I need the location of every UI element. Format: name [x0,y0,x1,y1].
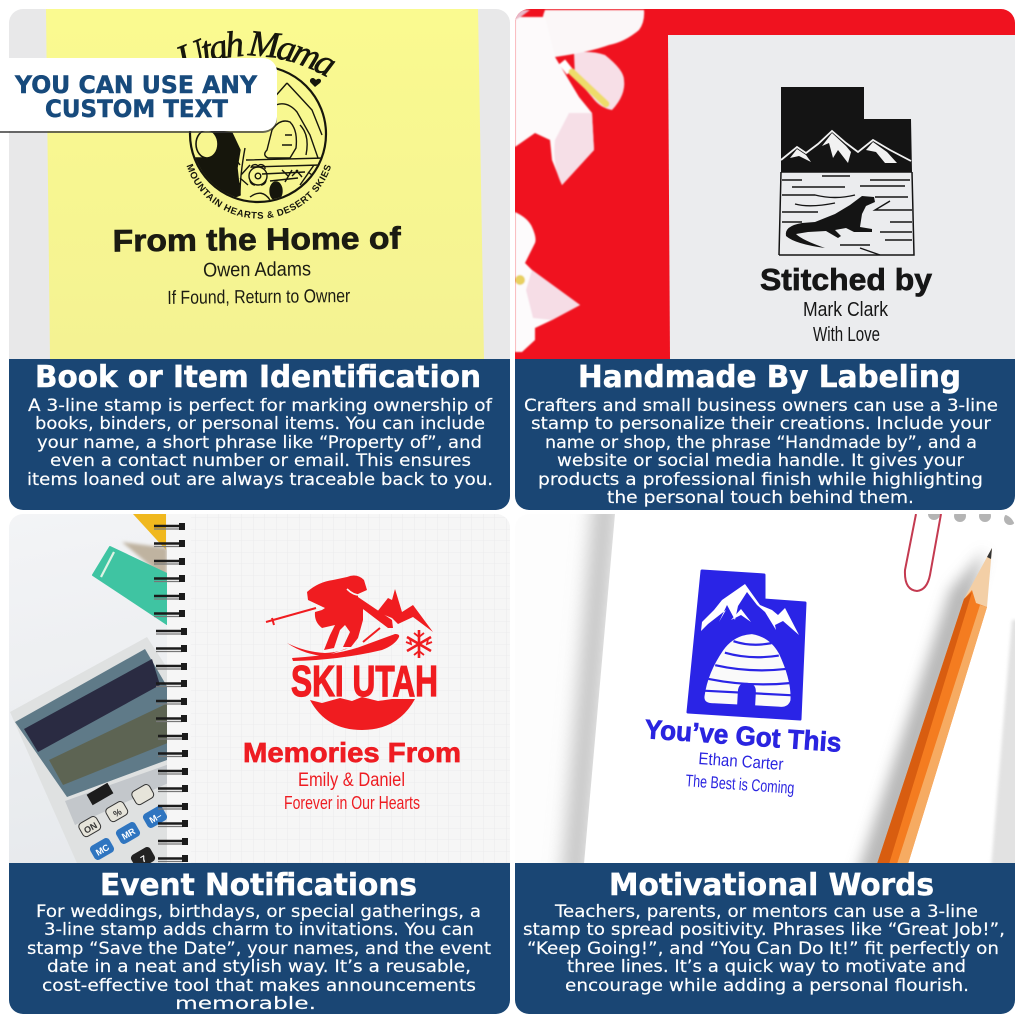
paper holes [928,514,1014,525]
calculator [10,637,175,870]
stamp logo: Utah with mountains and lizard [779,87,914,255]
calculator: % [112,807,123,819]
callout: you can use any custom text: YOU CAN USE ANY [14,71,258,99]
stamp logo: Utah Mama: MOUNTAIN HEARTS & DESERT SKIES [186,164,331,219]
flowers [515,10,644,352]
heading: Book or Item Identification: Book or Item Identification [35,360,481,395]
body text: three lines. It’s a quick way to motivate and [567,957,966,976]
heading: Handmade By Labeling: Handmade By Labeling [578,360,961,395]
body text: your name, a short phrase like “Property of”, and [37,433,482,452]
body text: even a contact number or email. This ensures [50,451,471,470]
stamp text: Memories From: Memories From [243,737,461,768]
body text [524,396,998,507]
body text: “Keep Going!”, and “You Can Do It!” fit perfectly on [527,939,999,958]
body text: stamp to spread positivity. Phrases like “Great Job!”, [523,920,1005,939]
body text: items loaned out are always traceable back to you. [27,470,493,489]
panel: event notifications [9,514,510,1014]
pencil [855,548,992,880]
stamp text: From the Home of [114,226,402,306]
stamp text: From the Home of: If Found, Return to Owner [167,286,351,309]
calculator: 7 [139,853,148,864]
caption band [9,863,510,1014]
body text [27,902,492,1013]
stamp text: Memories From: Emily & Daniel [298,770,405,791]
caption band [515,359,1015,510]
stamp text: Stitched by [760,268,932,341]
body text: memorable. [175,994,316,1013]
stamp text: From the Home of: From the Home of [113,220,402,259]
white card [668,35,1015,359]
caption band [9,359,510,510]
callout: you can use any custom text: CUSTOM TEXT [45,95,229,123]
teal eraser [93,542,167,624]
stamp text: Stitched by: With Love [813,324,880,346]
spiral binding [154,523,187,862]
yellow note paper [46,9,484,359]
stamp logo: Ski Utah [266,576,438,730]
body text: date in a neat and stylish way. It’s a reusable, [47,957,471,976]
body text: A 3-line stamp is perfect for marking ownership of [28,396,493,415]
panel: motivational words [515,470,1024,1014]
body text: the personal touch behind them. [607,488,914,507]
body text: Teachers, parents, or mentors can use a 3-line [554,902,978,921]
calculator: MC [94,842,111,858]
body text: stamp to personalize their creations. Include your [531,414,991,433]
body text [27,396,493,489]
stamp logo: Utah with beehive [688,571,805,719]
stamp text: Stitched by: Stitched by [760,262,933,297]
body text: name or shop, the phrase “Handmade by”, and a [545,433,977,452]
callout: you can use any custom text [0,58,277,133]
stamp text: Memories From [244,742,460,809]
body text: products a professional finish while highlighting [538,470,983,489]
stamp text: Stitched by: Mark Clark [803,299,889,321]
body text: books, binders, or personal items. You can include [35,414,485,433]
paper shadow and sheet [554,514,1015,863]
stamp text: From the Home of: Owen Adams [203,258,311,282]
calculator: MR [120,826,137,842]
stamp text: You've Got This: The Best is Coming [685,771,795,798]
panel: book or item identification [9,9,510,510]
paper clip [905,514,941,591]
body text [523,902,1005,995]
heading: Event Notifications: Event Notifications [100,868,417,903]
stamp text: You've Got This: Ethan Carter [698,749,784,774]
body text: cost-effective tool that makes announcements [42,976,476,995]
body text: encourage while adding a personal flourish. [565,976,969,995]
stamp text: You've Got This [644,714,842,798]
stamp logo: Ski Utah: SKI UTAH [291,657,438,706]
panel: handmade by labeling [515,9,1015,510]
heading: Motivational Words: Motivational Words [609,868,934,903]
stamp text: You've Got This: You’ve Got This [644,714,842,758]
calculator: ON [82,820,99,836]
caption band [515,863,1015,1014]
body text: Crafters and small business owners can use a 3-line [524,396,998,415]
body text: 3-line stamp adds charm to invitations. You can [44,920,474,939]
stamp logo: Utah Mama [177,30,336,219]
yellow pencil end [133,514,166,550]
body text: website or social media handle. It gives your [557,451,964,470]
stamp logo: Utah Mama: Utah Mama [177,30,336,78]
body text: stamp “Save the Date”, your names, and the event [27,939,492,958]
calculator: M– [148,810,163,825]
notebook page with grid [167,514,510,864]
body text: For weddings, birthdays, or special gatherings, a [36,902,481,921]
stamp text: Memories From: Forever in Our Hearts [284,793,420,813]
